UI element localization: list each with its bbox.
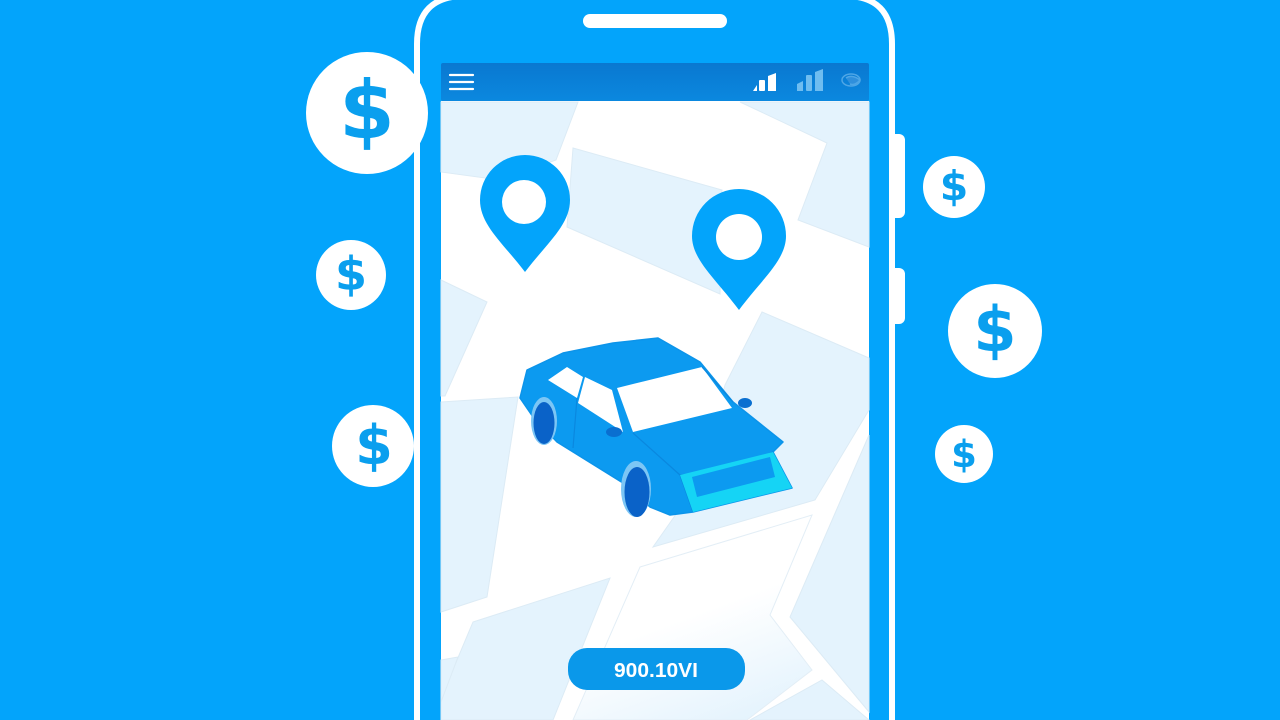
coin left lower: $ [355,414,393,477]
map pin left [480,155,570,272]
car rear window [548,367,583,398]
fare pill [568,648,745,690]
car side window [578,377,623,432]
map pin right [692,189,786,310]
speaker [583,14,727,28]
phone body [417,0,892,720]
map [441,101,869,720]
car mirrors [606,427,622,437]
phone side buttons [888,134,905,324]
icon: menu [450,75,473,89]
coin right lower: $ [951,433,977,476]
coin right middle [948,284,1042,378]
car grille [680,452,792,512]
phone [417,0,905,720]
coin right top [923,156,985,218]
icon: signal weak [797,69,823,91]
fare pill: 900.10VI [614,660,698,682]
coin left lower [332,405,414,487]
icon: status blob [842,74,860,86]
coin right lower [935,425,993,483]
app header bar [441,63,869,101]
car rear wheel [531,397,557,445]
coin left middle: $ [335,247,367,301]
car [520,338,792,517]
car front wheel [621,461,651,517]
car windshield [617,367,732,432]
icon: signal strong [753,73,776,91]
car body [520,338,792,515]
coin right middle: $ [973,293,1017,366]
coin left middle [316,240,386,310]
car body lines [573,367,773,512]
coin right top: $ [940,162,968,210]
coin large top left: $ [339,64,395,157]
coin large top left [306,52,428,174]
